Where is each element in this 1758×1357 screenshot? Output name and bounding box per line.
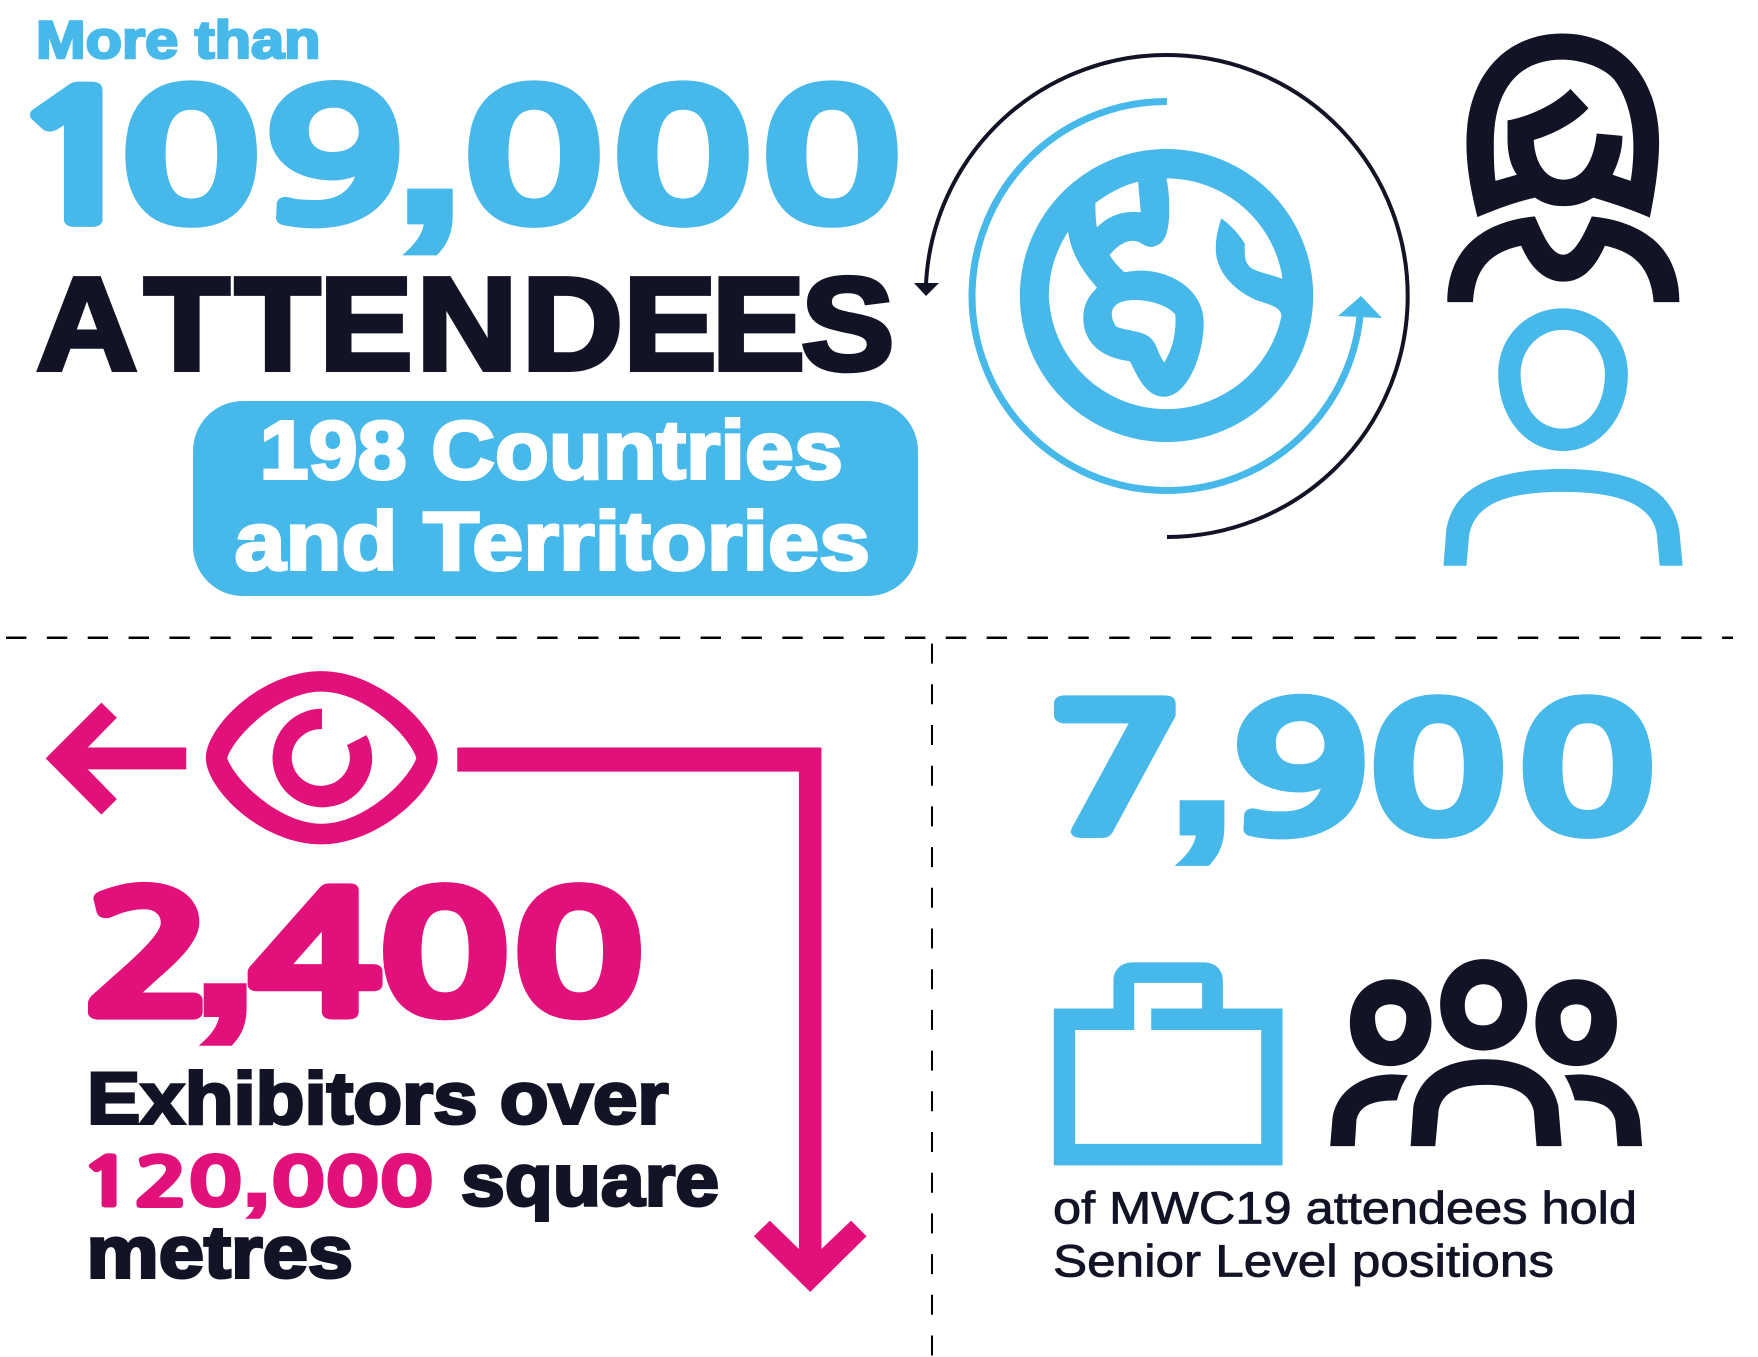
text: exhibitors over: Exhibitors over: [87, 1058, 668, 1140]
panel: total attendees: [6, 11, 918, 596]
callout: countries and territories: [193, 401, 918, 596]
arrow: blue orbit: [972, 101, 1382, 490]
icon: man: [1443, 308, 1683, 566]
icon: woman: [1447, 33, 1679, 302]
big number: 7,900: 7,900: [1046, 655, 1657, 874]
panel: exhibitors: [46, 671, 867, 1294]
icon: woman and man attendees: [1443, 33, 1683, 566]
big number: 2,400: 2,400: [82, 847, 645, 1054]
heading: attendees: ATTENDEES: [36, 250, 894, 398]
text: 120,000: 120 ,000: [80, 1138, 434, 1222]
icon: three people: [1330, 959, 1642, 1146]
callout: countries and territories: 198 Countries: [260, 404, 843, 496]
text: square: square: [461, 1140, 719, 1222]
icon: briefcase: [1054, 962, 1283, 1165]
text: metres: metres: [86, 1212, 353, 1294]
text: more than: More than: [36, 11, 320, 70]
arrow: right then down: [457, 747, 867, 1292]
text: senior level description: [1053, 1182, 1637, 1286]
panel: senior level: [1046, 655, 1657, 1286]
text: senior level description: Senior Level positions: [1053, 1236, 1554, 1286]
icon: eye: [206, 671, 438, 844]
big number: 109,000: 109,000: [6, 40, 903, 264]
icon: eye with arrows: [46, 671, 867, 1292]
callout: countries and territories: and Territories: [234, 494, 870, 588]
icon: globe: [1020, 149, 1313, 442]
icon: globe with orbit arrows: [914, 55, 1408, 537]
text: senior level description: of MWC19 attendees hold: [1053, 1182, 1637, 1234]
arrow: left: [46, 703, 186, 815]
arrow: dark orbit: [914, 55, 1408, 537]
